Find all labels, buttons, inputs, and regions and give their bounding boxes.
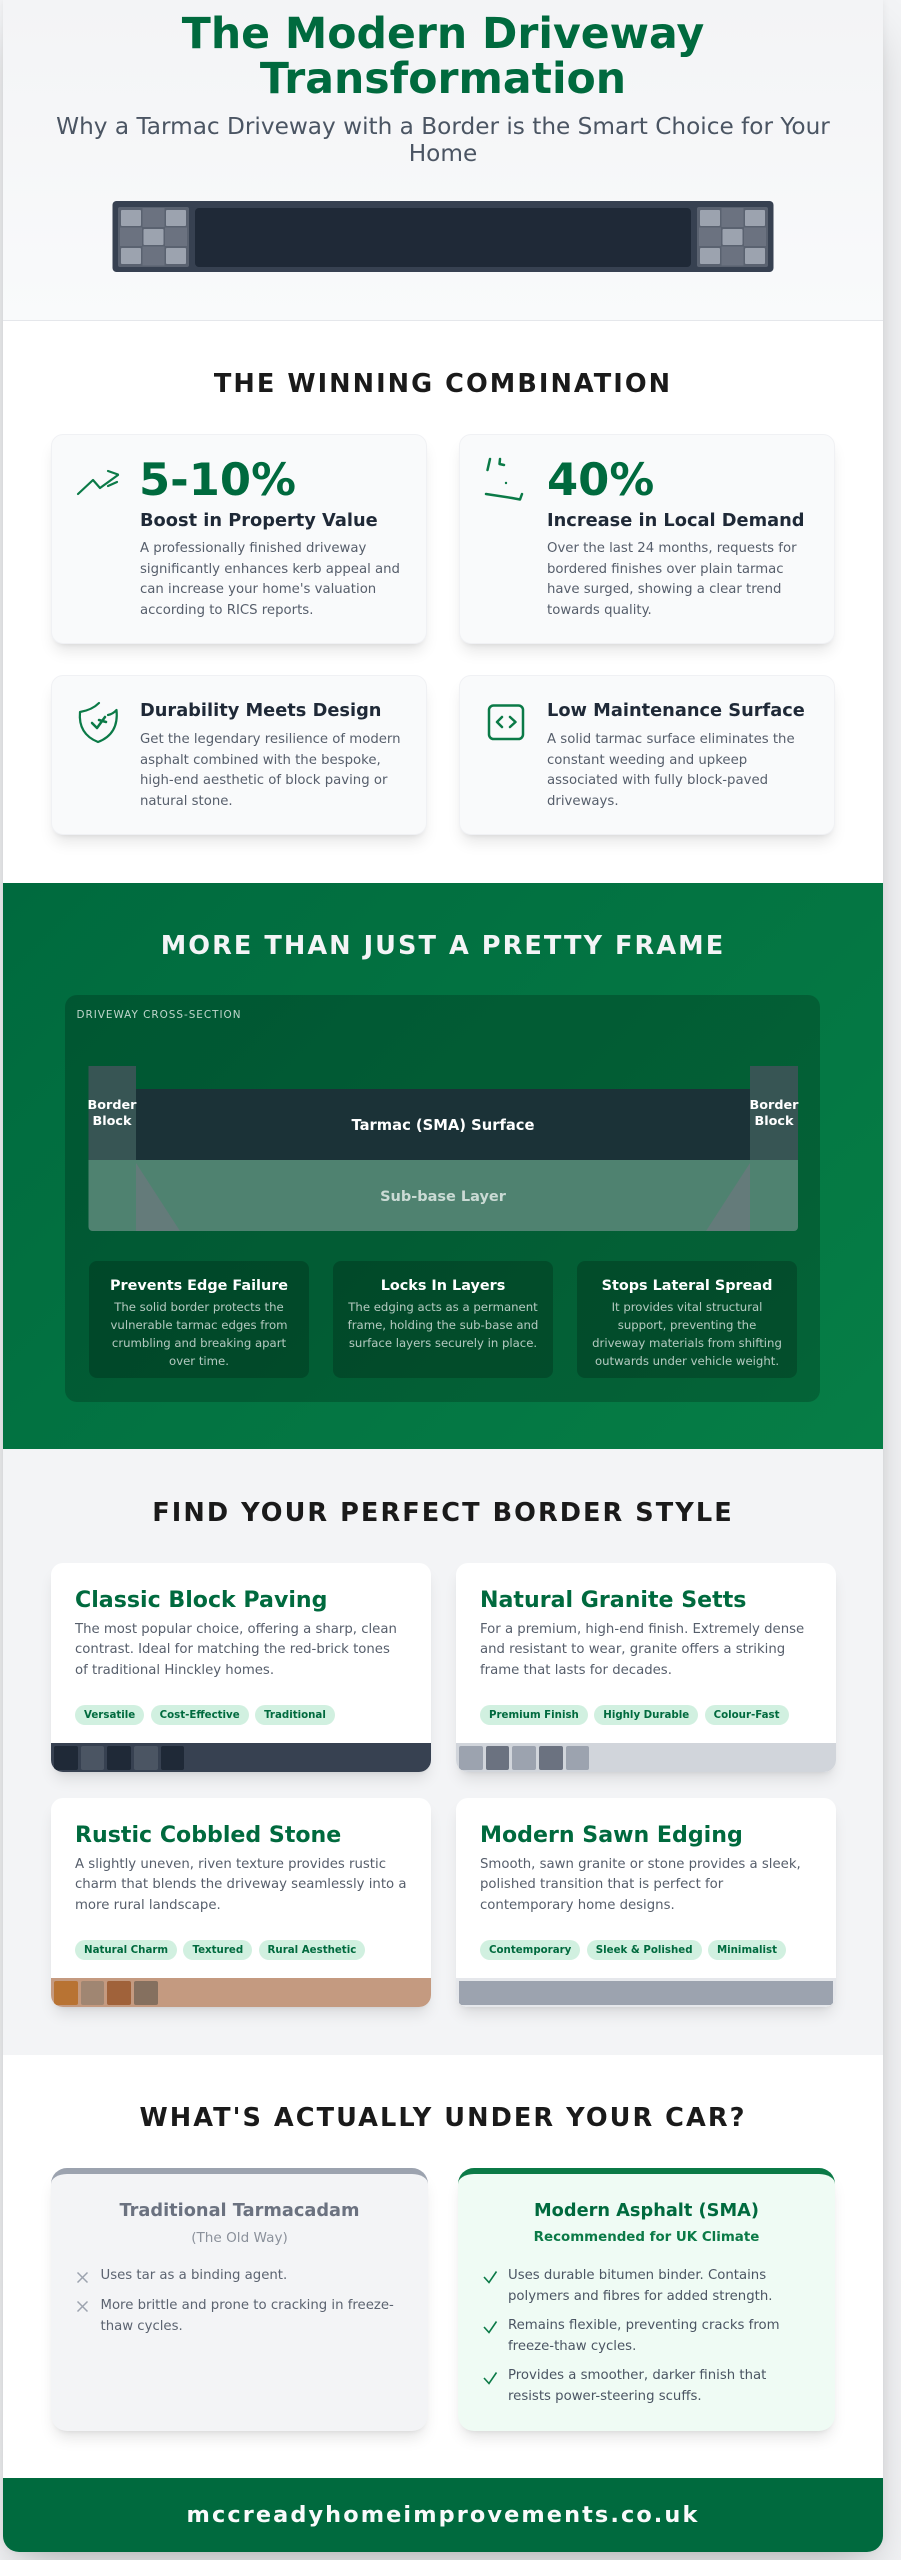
icon: demand	[484, 458, 524, 501]
card: rustic cobbled stone: charm that blends the driveway seamlessly into a	[75, 1877, 406, 1892]
card: rustic cobbled stone	[51, 1798, 431, 2007]
card: durability	[51, 675, 427, 835]
card: prevents edge failure: vulnerable tarmac edges from	[111, 1318, 287, 1332]
label: left border block	[87, 1098, 136, 1129]
driveway illustration	[112, 201, 774, 272]
card: maintenance	[459, 675, 835, 835]
card text: demand	[547, 541, 797, 618]
card: modern sawn edging: Minimalist	[717, 1944, 777, 1956]
card: modern sawn edging: Modern Sawn Edging	[480, 1822, 743, 1848]
card: rustic cobbled stone: A slightly uneven, riven texture provides rustic	[75, 1856, 386, 1872]
card title: traditional: Traditional Tarmacadam	[119, 2201, 360, 2221]
label: right border block: Border	[749, 1098, 798, 1113]
card: classic block paving: Traditional	[264, 1709, 326, 1721]
card text: durability: high-end aesthetic of block paving or	[140, 773, 387, 788]
icon: check 3	[484, 2372, 498, 2385]
card text: durability: natural stone.	[140, 794, 233, 809]
list item: flexible: Remains flexible, preventing cracks from	[508, 2318, 780, 2333]
card: prevents edge failure	[89, 1261, 309, 1378]
icon: cross 1	[77, 2272, 88, 2283]
card: natural granite setts: Premium Finish	[489, 1709, 579, 1721]
card text: durability: Get the legendary resilience of modern	[140, 732, 401, 747]
card text: demand: bordered finishes over plain tarmac	[547, 562, 784, 577]
card text: maintenance	[547, 732, 795, 809]
card: modern sawn edging: Sleek & Polished	[596, 1944, 693, 1956]
heading: under your car: WHAT'S ACTUALLY UNDER YOUR CAR?	[139, 2103, 747, 2133]
list item: flexible: freeze-thaw cycles.	[508, 2339, 636, 2354]
diagram: layers	[88, 1066, 798, 1231]
card: modern sawn edging: Smooth, sawn granite or stone provides a sleek,	[480, 1856, 801, 1872]
card: classic block paving: of traditional Hinckley homes.	[75, 1663, 274, 1678]
card: prevents edge failure: over time.	[169, 1354, 229, 1368]
header panel	[3, 0, 883, 321]
card: rustic cobbled stone: Rural Aesthetic	[268, 1944, 356, 1956]
panel: green section	[3, 883, 883, 1449]
icon: check 1	[484, 2271, 498, 2284]
card: stops lateral spread: support, preventing the	[618, 1318, 756, 1332]
label: right border block: Block	[754, 1114, 794, 1129]
heading: border style: FIND YOUR PERFECT BORDER STYLE	[152, 1498, 734, 1528]
card: natural granite setts: and resistant to wear, granite offers a striking	[480, 1642, 785, 1657]
card: property value	[51, 434, 427, 644]
card: prevents edge failure: The solid border protects the	[114, 1300, 284, 1314]
heading: pretty frame: MORE THAN JUST A PRETTY FRAME	[161, 930, 725, 960]
card: classic block paving: Cost-Effective	[160, 1709, 240, 1721]
icon: shield	[78, 702, 118, 744]
card subtitle: recommended: Recommended for UK Climate	[534, 2230, 759, 2245]
footer: mccreadyhomeimprovements.co.uk	[187, 2502, 699, 2528]
card text: boost: can increase your home's valuation	[140, 582, 376, 597]
card: natural granite setts	[456, 1563, 836, 1772]
card: local demand	[459, 434, 835, 644]
list item: brittle: thaw cycles.	[100, 2319, 183, 2334]
label: tarmac: Tarmac (SMA) Surface	[351, 1117, 535, 1134]
card title: demand: Increase in Local Demand	[547, 510, 805, 531]
panel: cross-section	[65, 995, 820, 1402]
shadow: classic block	[51, 1563, 431, 1772]
card title: durability: Durability Meets Design	[140, 700, 381, 721]
card: natural granite setts: frame that lasts for decades.	[480, 1663, 672, 1678]
card text: maintenance: associated with fully block-paved	[547, 773, 768, 788]
card: prevents edge failure: crumbling and breaking apart	[112, 1336, 286, 1350]
card title: maintenance: Low Maintenance Surface	[547, 700, 805, 721]
list item: tar: Uses tar as a binding agent.	[100, 2268, 287, 2283]
card text: boost: significantly enhances kerb appeal and	[140, 562, 400, 577]
card: stops lateral spread: Stops Lateral Spread	[602, 1278, 772, 1294]
card text: maintenance: A solid tarmac surface eliminates the	[547, 732, 795, 747]
icon: cross 2	[77, 2301, 88, 2312]
card text: demand: towards quality.	[547, 603, 652, 618]
card: modern asphalt	[458, 2168, 835, 2431]
icon: check 2	[484, 2321, 498, 2334]
card: modern sawn edging: polished transition that is perfect for	[480, 1877, 723, 1892]
stat: 5-10%: 5-10%	[139, 453, 296, 506]
card: modern sawn edging: contemporary home designs.	[480, 1898, 675, 1913]
card: prevents edge failure: Prevents Edge Failure	[110, 1278, 288, 1294]
card title: boost: Boost in Property Value	[140, 510, 378, 531]
list item: bitumen	[508, 2268, 772, 2304]
list item: smoother: Provides a smoother, darker finish that	[508, 2368, 766, 2383]
card text: maintenance: constant weeding and upkeep	[547, 753, 747, 768]
card: locks in layers: Locks In Layers	[381, 1278, 505, 1294]
card: locks in layers	[333, 1261, 553, 1378]
shadow: granite	[456, 1563, 836, 1772]
card: classic block paving: Classic Block Paving	[75, 1586, 327, 1612]
card: stops lateral spread: driveway materials from shifting	[592, 1336, 782, 1350]
card: natural granite setts: Highly Durable	[603, 1709, 689, 1721]
card: natural granite setts: Natural Granite Setts	[480, 1586, 746, 1612]
footer	[3, 2478, 883, 2552]
card title: asphalt: Modern Asphalt (SMA)	[534, 2201, 759, 2221]
card: stops lateral spread: It provides vital structural	[612, 1300, 762, 1314]
label: cross-section: DRIVEWAY CROSS-SECTION	[76, 1008, 242, 1020]
card: traditional tarmacadam	[51, 2168, 428, 2431]
list item: smoother: resists power-steering scuffs.	[508, 2389, 702, 2404]
title: The Modern Driveway	[182, 9, 704, 59]
card: rustic cobbled stone: Textured	[192, 1944, 243, 1956]
shadow: sawn	[456, 1798, 836, 2007]
card: stops lateral spread: outwards under vehicle weight.	[595, 1354, 779, 1368]
card: natural granite setts: For a premium, high-end finish. Extremely dense	[480, 1622, 804, 1636]
subtitle: Why a Tarmac Driveway with a Border is the Smart Choice for Your	[56, 113, 830, 140]
heading: the winning combination: THE WINNING COMBINATION	[214, 369, 672, 399]
card: classic block paving	[51, 1563, 431, 1772]
card: stops lateral spread	[577, 1261, 797, 1378]
panel: border styles section	[3, 1449, 883, 2055]
card text: demand: Over the last 24 months, requests for	[547, 541, 797, 556]
card text: boost: according to RICS reports.	[140, 603, 313, 618]
stat: 40%: 40%	[547, 453, 654, 506]
shadow: cobble	[51, 1798, 431, 2007]
card: modern sawn edging: Contemporary	[489, 1944, 571, 1956]
card: rustic cobbled stone: more rural landscape.	[75, 1898, 221, 1913]
label: left border block: Block	[92, 1114, 132, 1129]
card: classic block paving: The most popular choice, offering a sharp, clean	[75, 1622, 397, 1636]
title	[182, 9, 704, 104]
card: natural granite setts: Colour-Fast	[714, 1709, 780, 1721]
card text: demand: have surged, showing a clear trend	[547, 582, 781, 597]
subtitle	[56, 113, 830, 167]
subtitle: Home	[409, 140, 477, 167]
icon: code box	[488, 704, 524, 740]
card: locks in layers: surface layers securely in place.	[349, 1336, 537, 1350]
card: locks in layers: The edging acts as a permanent	[348, 1300, 538, 1314]
list item: brittle: More brittle and prone to cracking in freeze-	[100, 2298, 394, 2313]
card subtitle: old way: (The Old Way)	[191, 2230, 288, 2246]
list item: brittle	[100, 2298, 394, 2334]
card text: boost	[140, 541, 400, 618]
list item: bitumen: polymers and fibres for added strength.	[508, 2289, 772, 2304]
label: sub-base: Sub-base Layer	[380, 1188, 506, 1204]
list item: bitumen: Uses durable bitumen binder. Contains	[508, 2268, 766, 2283]
card text: maintenance: driveways.	[547, 794, 619, 809]
label: left border block: Border	[87, 1098, 136, 1113]
card: locks in layers: frame, holding the sub-base and	[348, 1318, 538, 1332]
card text: boost: A professionally finished driveway	[140, 541, 366, 556]
card text: durability: asphalt combined with the bespoke,	[140, 753, 381, 768]
card: rustic cobbled stone: Natural Charm	[84, 1944, 168, 1956]
card: modern sawn edging	[456, 1798, 836, 2007]
card: classic block paving: Versatile	[84, 1709, 135, 1721]
icon: trend	[76, 470, 120, 496]
list item: smoother	[508, 2368, 766, 2404]
title: Transformation	[260, 54, 626, 104]
label: right border block	[749, 1098, 798, 1129]
card text: durability	[140, 732, 401, 809]
list item: flexible	[508, 2318, 780, 2354]
card: classic block paving: contrast. Ideal for matching the red-brick tones	[75, 1642, 390, 1657]
card: rustic cobbled stone: Rustic Cobbled Stone	[75, 1822, 341, 1848]
